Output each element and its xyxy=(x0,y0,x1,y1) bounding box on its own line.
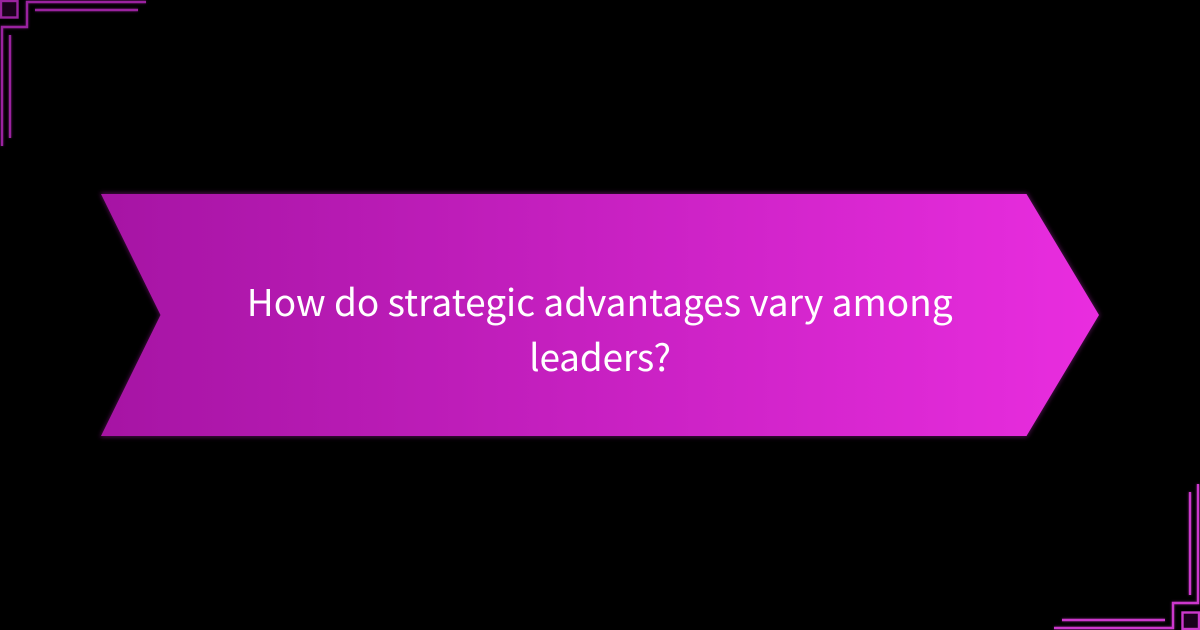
corner ornament: top left xyxy=(1,1,146,146)
heading text: leaders? xyxy=(529,328,671,382)
heading text xyxy=(247,273,953,382)
corner ornament: bottom right xyxy=(1054,484,1199,629)
arrow banner xyxy=(100,193,1100,437)
heading text: How do strategic advantages vary among xyxy=(247,273,953,327)
